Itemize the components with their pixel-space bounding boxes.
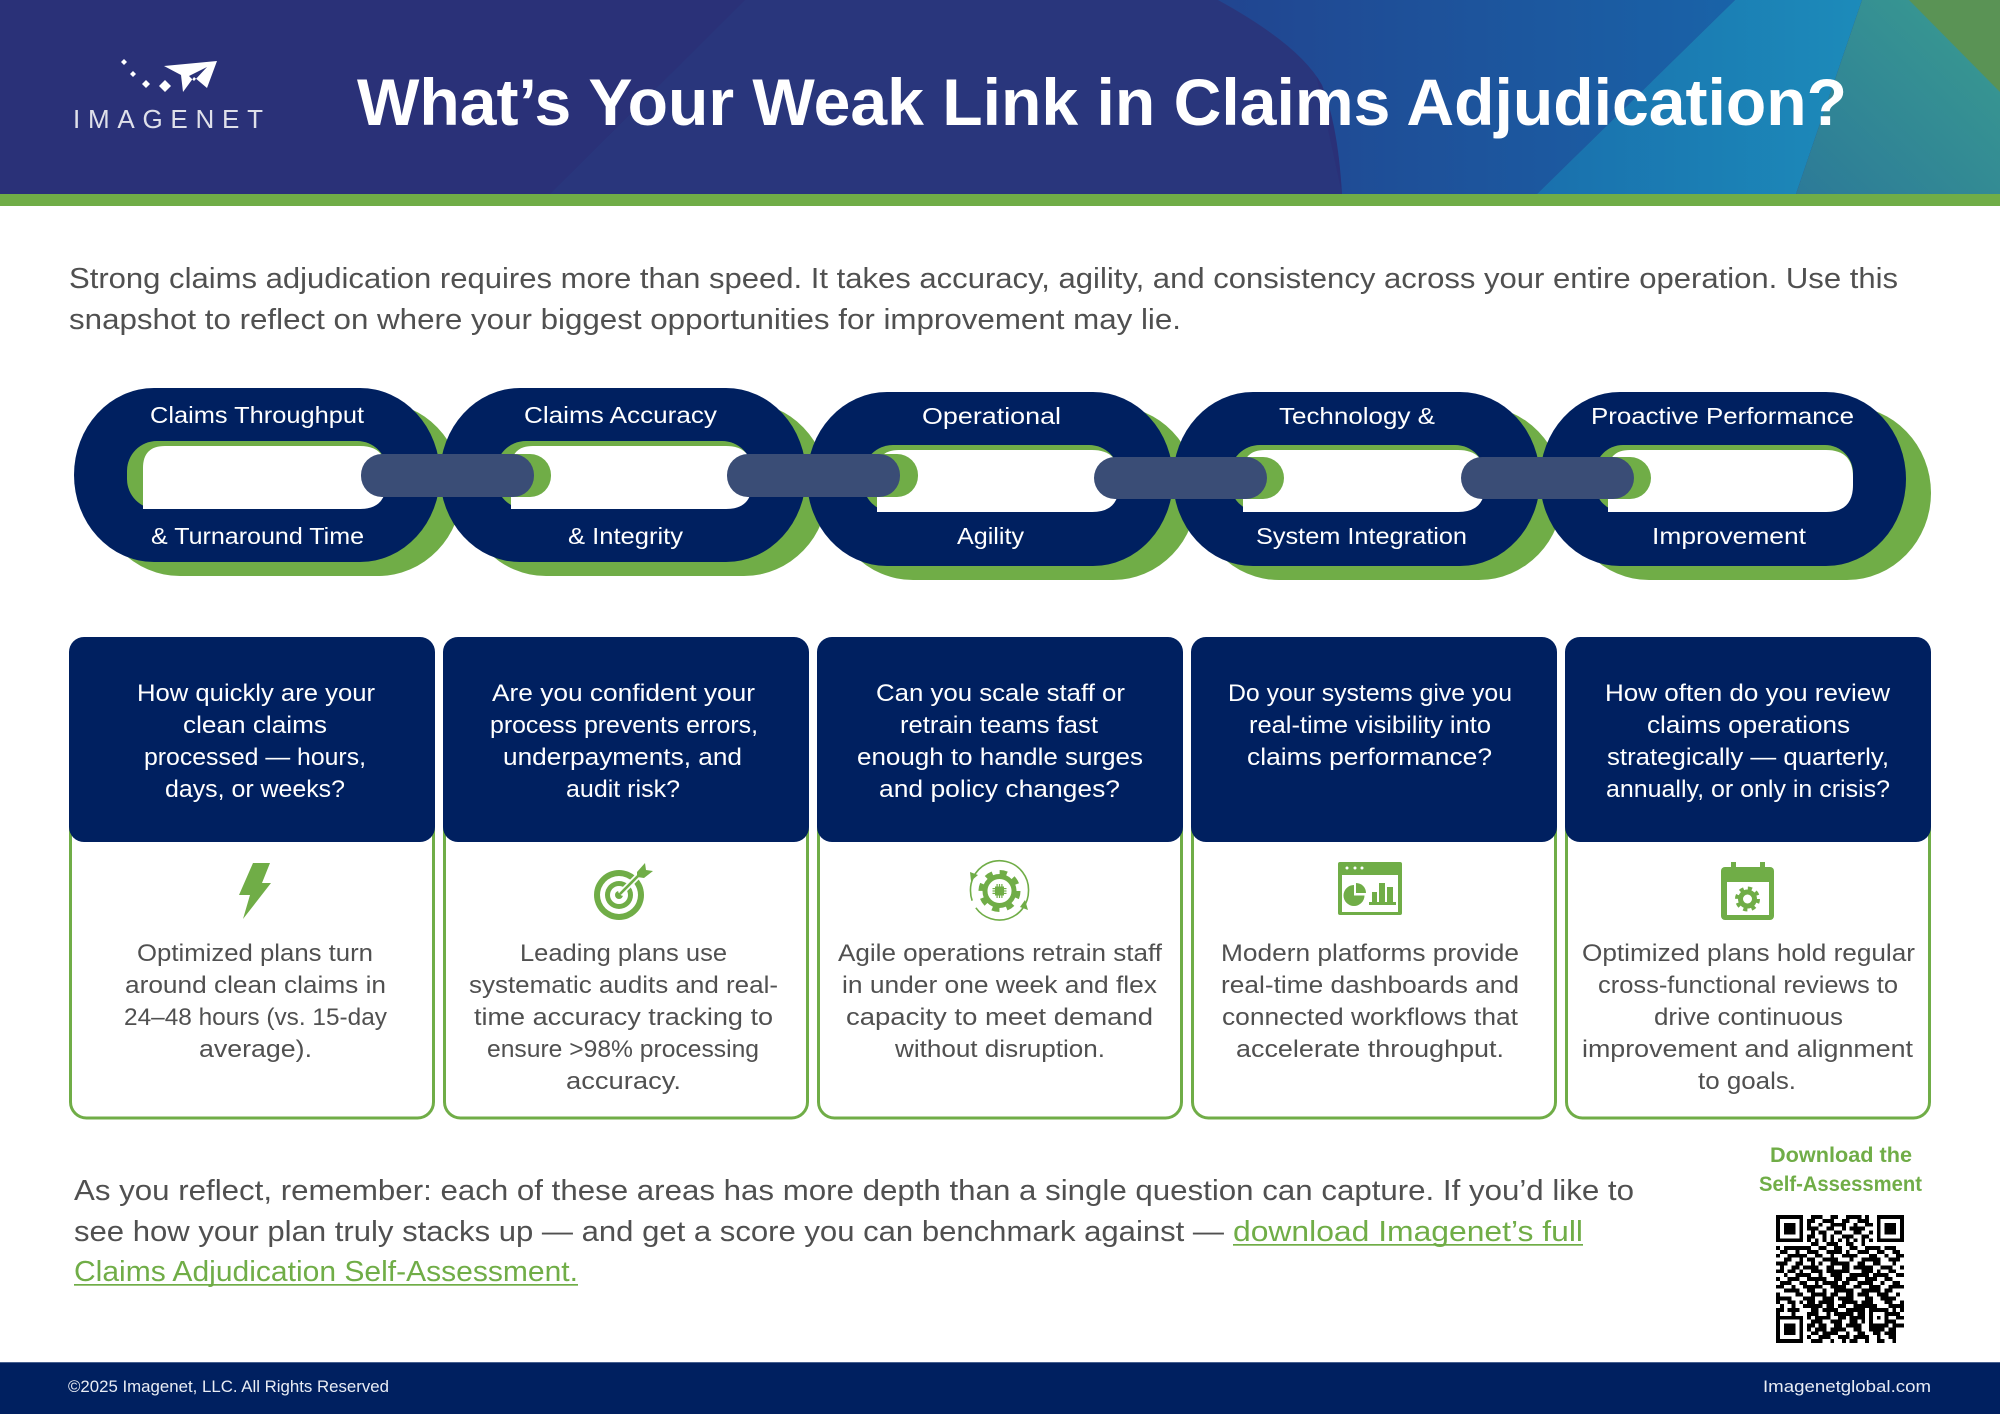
- chain shadows: [96, 402, 1931, 580]
- card 2 body: Leading plans use: [520, 940, 727, 967]
- card 5 question: claims operations: [1647, 712, 1850, 739]
- card 5 header: [1565, 637, 1931, 842]
- card 1 body: around clean claims in: [125, 972, 386, 999]
- link text: [74, 1216, 1583, 1288]
- card 4 header: [1191, 637, 1557, 842]
- logo: Imagenet: [73, 59, 263, 134]
- card 1 header: [69, 637, 435, 842]
- card 3 question: enough to handle surges: [857, 744, 1143, 771]
- link 1 body: [74, 388, 440, 562]
- link labels: Improvement: [1652, 523, 1807, 549]
- card 1 body: 24–48 hours (vs. 15-day: [124, 1004, 387, 1031]
- card 5 body: improvement and alignment: [1582, 1036, 1913, 1063]
- card 2 question: underpayments, and: [503, 744, 742, 771]
- card 4 question: real-time visibility into: [1249, 712, 1491, 739]
- icon: lightning bolt: [239, 863, 271, 919]
- QR code: [1776, 1215, 1904, 1343]
- card 5 body: [1582, 940, 1915, 1095]
- closing paragraph: see how your plan truly stacks up — and get a score you can benchmark against —: [74, 1216, 1224, 1248]
- header banner: [0, 0, 2000, 206]
- card 3 body: Agile operations retrain staff: [838, 940, 1162, 967]
- card 4 body: accelerate throughput.: [1236, 1036, 1504, 1063]
- link labels: Agility: [957, 523, 1024, 549]
- chain of five links: [74, 388, 1931, 580]
- card 5 question: strategically — quarterly,: [1607, 744, 1889, 771]
- link 4 body: [1173, 392, 1540, 566]
- card 3 question: [857, 680, 1143, 803]
- card 3 body: without disruption.: [894, 1036, 1105, 1063]
- connector 3: [1094, 457, 1284, 499]
- footer bar: [0, 1362, 2000, 1414]
- card 2 body: accuracy.: [566, 1068, 681, 1095]
- download heading: Self-Assessment: [1759, 1173, 1922, 1196]
- card 3 header: [817, 637, 1183, 842]
- panel: card 1 throughput: [69, 637, 435, 1118]
- connector 4: [1461, 457, 1651, 499]
- icon: gear with chip and cycle arrows: [970, 861, 1029, 920]
- link text: Claims Adjudication Self-Assessment.: [74, 1256, 578, 1288]
- title: What’s Your Weak Link in Claims Adjudication?: [357, 65, 1847, 139]
- card 2 question: process prevents errors,: [490, 712, 758, 739]
- card 3 question: retrain teams fast: [900, 712, 1098, 739]
- link labels: Claims Accuracy: [524, 402, 717, 428]
- card 1 question: How quickly are your: [137, 680, 375, 707]
- card 4 question: claims performance?: [1247, 744, 1492, 771]
- card 5 question: How often do you review: [1605, 680, 1891, 707]
- logo: Imagenet: IMAGENET: [73, 104, 263, 134]
- connector 1: [361, 454, 551, 497]
- card 3 question: and policy changes?: [879, 776, 1120, 803]
- link labels: Technology &: [1279, 403, 1435, 429]
- card 4 question: Do your systems give you: [1228, 680, 1512, 707]
- card 4 body: real-time dashboards and: [1221, 972, 1519, 999]
- card 3 body: [838, 940, 1162, 1063]
- card 5 body: drive continuous: [1654, 1004, 1843, 1031]
- icon: dashboard window: [1338, 862, 1402, 915]
- panel: card 3 agility: [817, 637, 1183, 1118]
- card 3 body: capacity to meet demand: [846, 1004, 1153, 1031]
- link labels: Proactive Performance: [1591, 403, 1854, 429]
- link labels: Operational: [922, 403, 1061, 429]
- card 3 question: Can you scale staff or: [876, 680, 1125, 707]
- link 5 body: [1540, 392, 1906, 566]
- card 1 question: processed — hours,: [144, 744, 366, 771]
- intro paragraph: snapshot to reflect on where your biggest opportunities for improvement may lie.: [69, 304, 1181, 336]
- download heading: Download the: [1770, 1144, 1912, 1167]
- panel: card 2 accuracy: [443, 637, 809, 1118]
- download heading: [1759, 1144, 1922, 1196]
- card 4 body: [1221, 940, 1519, 1063]
- closing paragraph: As you reflect, remember: each of these areas has more depth than a single question can capture. If you’d like to: [74, 1175, 1634, 1207]
- intro paragraph: Strong claims adjudication requires more than speed. It takes accuracy, agility, and consistency across your entire operation. Use this: [69, 263, 1898, 295]
- card 1 question: clean claims: [183, 712, 327, 739]
- card 1 body: [124, 940, 387, 1063]
- card 5 question: annually, or only in crisis?: [1606, 776, 1890, 803]
- card 2 body: [469, 940, 778, 1095]
- card 5 body: to goals.: [1698, 1068, 1796, 1095]
- icon: calendar with gear: [1721, 862, 1774, 920]
- card 2 question: [490, 680, 758, 803]
- card 5 body: Optimized plans hold regular: [1582, 940, 1915, 967]
- card 3 body: in under one week and flex: [842, 972, 1157, 999]
- panel: card 4 technology: [1191, 637, 1557, 1118]
- card 1 body: average).: [199, 1036, 312, 1063]
- link labels: & Turnaround Time: [151, 523, 364, 549]
- card 2 body: time accuracy tracking to: [474, 1004, 773, 1031]
- intro paragraph: [69, 263, 1898, 336]
- closing paragraph: [74, 1175, 1634, 1288]
- card 5 question: [1605, 680, 1891, 803]
- card 5 body: cross-functional reviews to: [1598, 972, 1898, 999]
- card 1 question: [137, 680, 375, 803]
- link labels: System Integration: [1256, 523, 1467, 549]
- card 2 question: audit risk?: [566, 776, 680, 803]
- link 3 body: [807, 392, 1173, 566]
- card 2 body: systematic audits and real-: [469, 972, 778, 999]
- card 2 question: Are you confident your: [492, 680, 755, 707]
- panel: card 5 improvement: [1565, 637, 1931, 1118]
- card 1 body: Optimized plans turn: [137, 940, 373, 967]
- website: Imagenetglobal.com: [1763, 1377, 1931, 1396]
- card 1 question: days, or weeks?: [165, 776, 345, 803]
- link text: download Imagenet’s full: [1233, 1216, 1583, 1248]
- card 4 body: Modern platforms provide: [1221, 940, 1519, 967]
- link labels: [150, 402, 1854, 549]
- card 2 header: [443, 637, 809, 842]
- card 2 body: ensure >98% processing: [487, 1036, 759, 1063]
- card 4 body: connected workflows that: [1222, 1004, 1518, 1031]
- copyright: ©2025 Imagenet, LLC. All Rights Reserved: [68, 1377, 389, 1396]
- connector 2: [727, 454, 918, 497]
- link labels: & Integrity: [568, 523, 683, 549]
- link labels: Claims Throughput: [150, 402, 365, 428]
- card 4 question: [1228, 680, 1512, 771]
- link 2 body: [440, 388, 806, 562]
- icon: target with arrow: [594, 863, 653, 920]
